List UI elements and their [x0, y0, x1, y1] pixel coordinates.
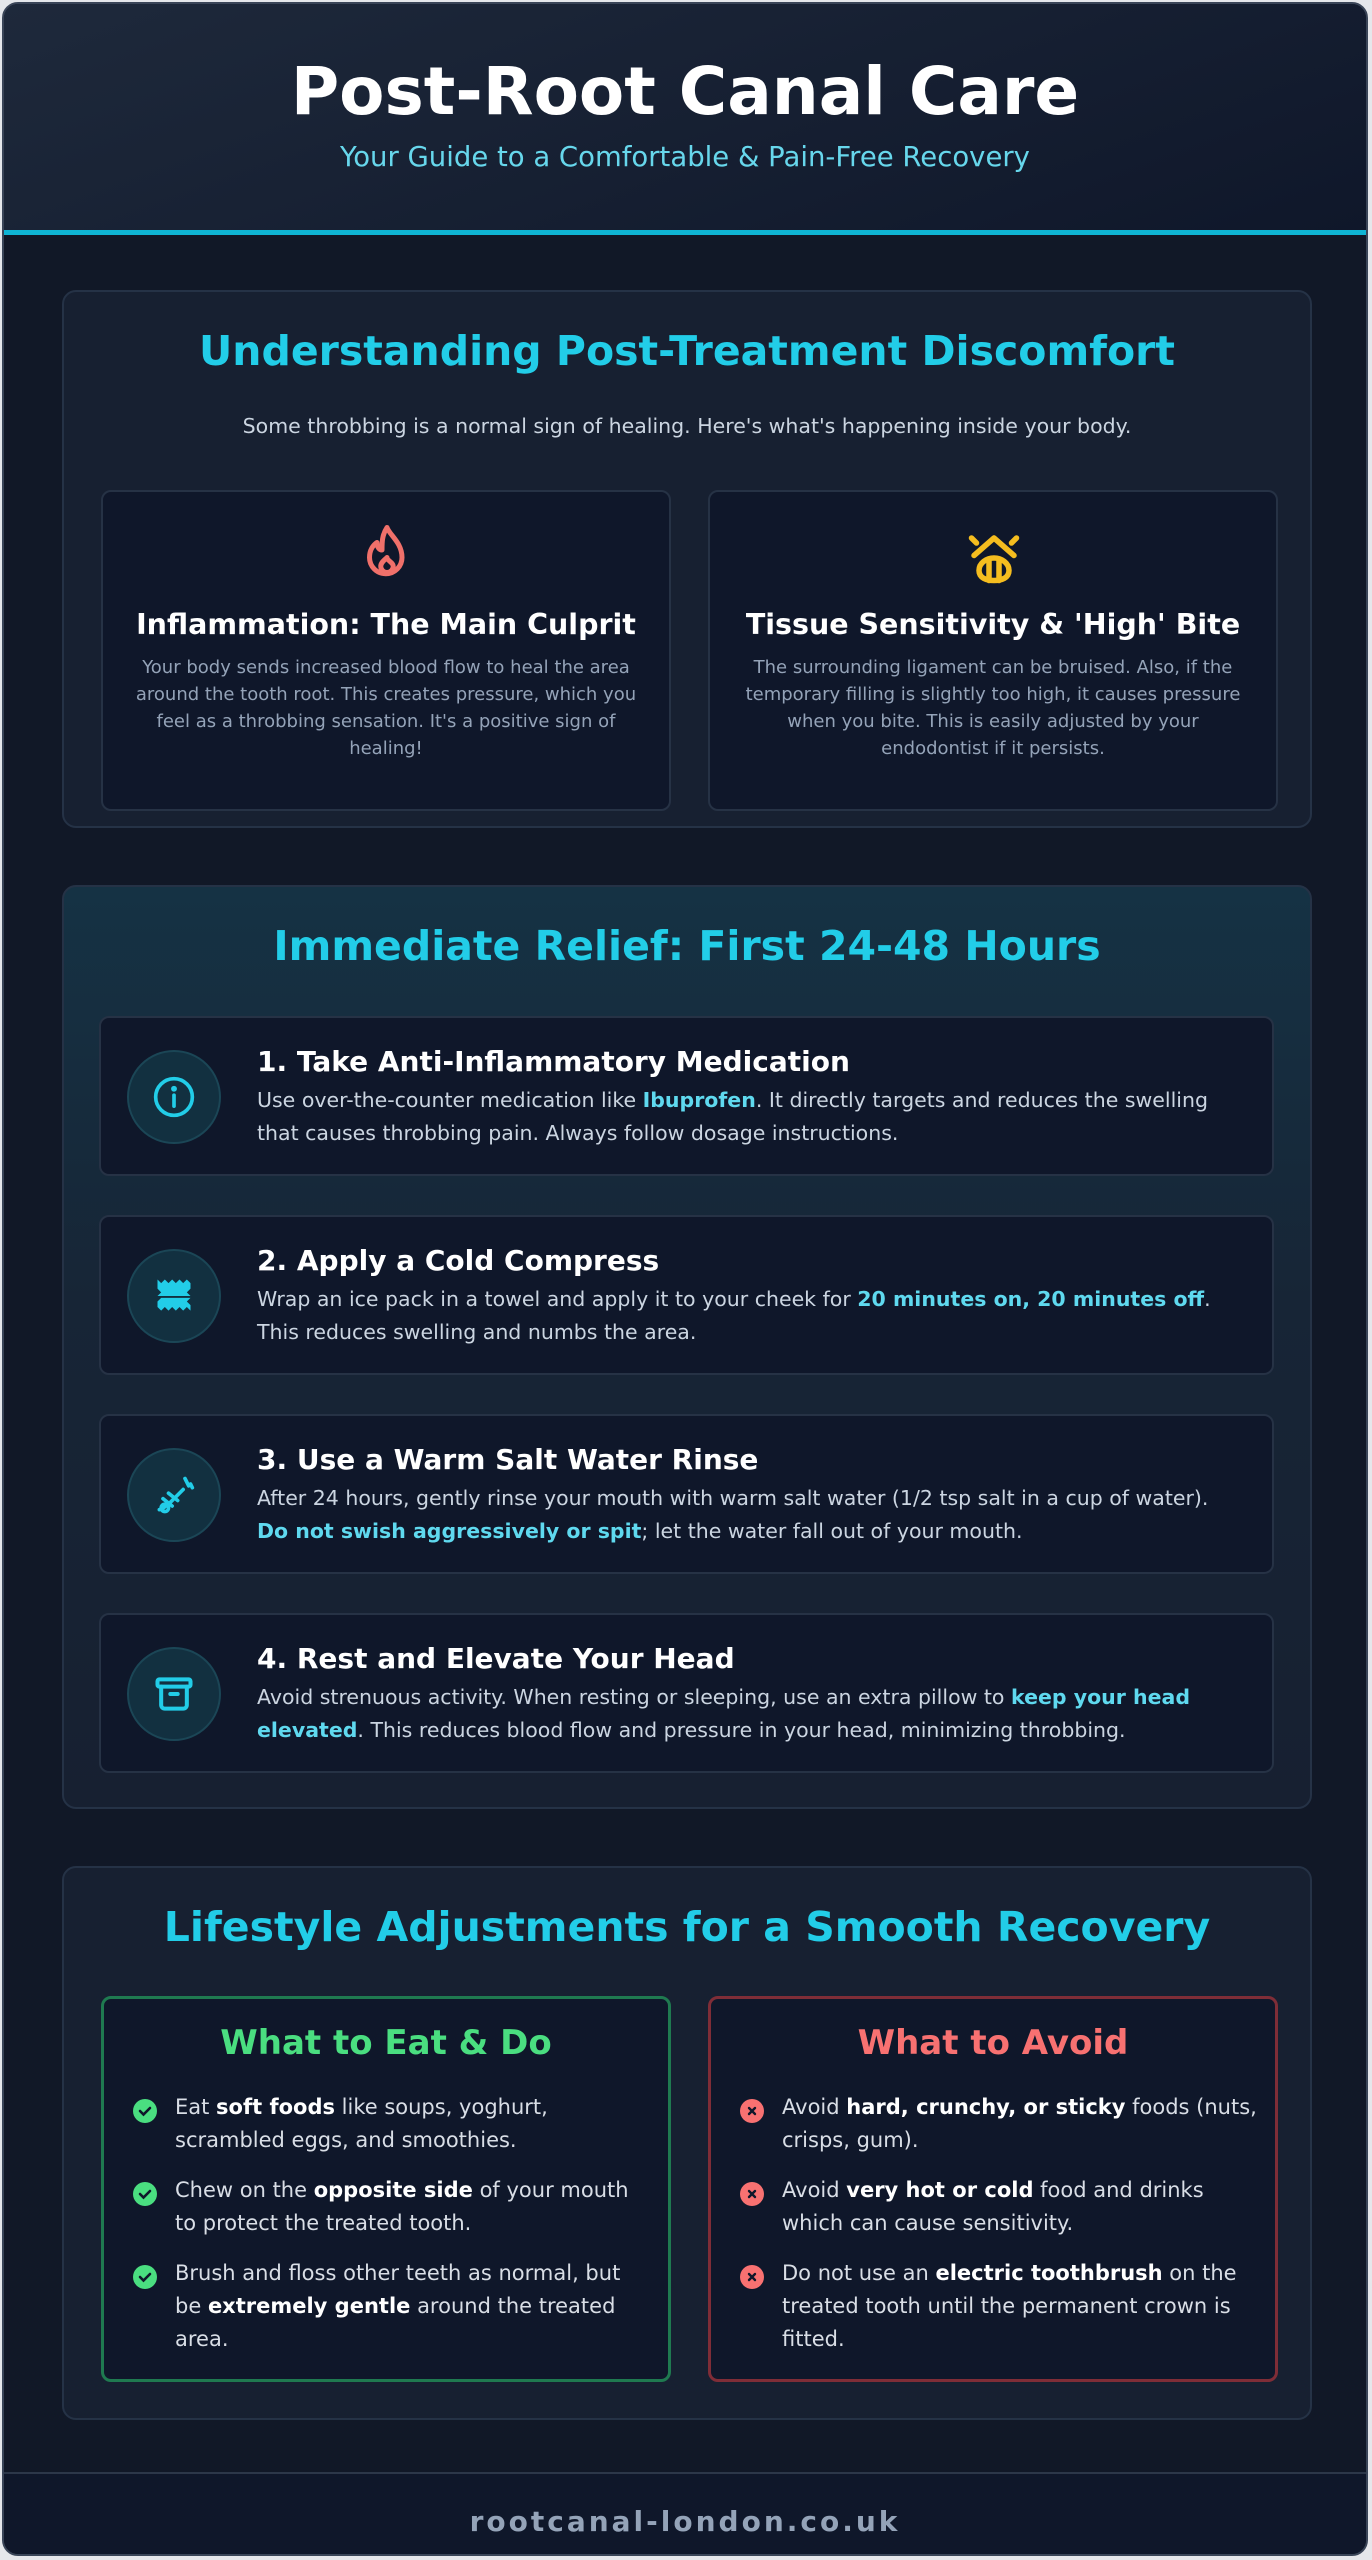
item: Chew on the opposite side of your mouth to protect the treated tooth.	[175, 2178, 629, 2235]
intro text: Some throbbing is a normal sign of healing. Here's what's happening inside your body.	[243, 414, 1131, 438]
item: Do not use an electric toothbrush on the treated tooth until the permanent crown is fitted.	[782, 2261, 1237, 2351]
heading: Understanding Post-Treatment Discomfort	[199, 327, 1175, 375]
step text: Wrap an ice pack in a towel and apply it to your cheek for 20 minutes on, 20 minutes off. This reduces swelling and numbs the area.	[257, 1287, 1211, 1344]
header	[4, 4, 1366, 230]
card heading: Inflammation: The Main Culprit	[136, 608, 636, 641]
box heading: What to Eat & Do	[220, 2023, 552, 2063]
list	[740, 2095, 1257, 2351]
step 4	[99, 1613, 1274, 1773]
card heading: Tissue Sensitivity & 'High' Bite	[746, 608, 1240, 641]
box: what to avoid	[708, 1996, 1278, 2382]
subtitle: Your Guide to a Comfortable & Pain-Free Recovery	[340, 141, 1030, 173]
step 3	[99, 1414, 1274, 1574]
step heading: 2. Apply a Cold Compress	[257, 1244, 659, 1277]
step text: After 24 hours, gently rinse your mouth with warm salt water (1/2 tsp salt in a cup of water). Do not swish aggressively or spit; let the water fall out of your mouth.	[257, 1486, 1208, 1543]
step 1	[99, 1016, 1274, 1176]
icon: flame	[367, 525, 404, 576]
card: inflammation	[101, 490, 671, 811]
item: Eat soft foods like soups, yoghurt, scrambled eggs, and smoothies.	[175, 2095, 548, 2152]
panel: immediate relief	[62, 885, 1312, 1809]
box: what to eat & do	[101, 1996, 671, 2382]
step text: Use over-the-counter medication like Ibuprofen. It directly targets and reduces the swelling that causes throbbing pain. Always follow dosage instructions.	[257, 1088, 1208, 1145]
item: Avoid hard, crunchy, or sticky foods (nuts, crisps, gum).	[782, 2095, 1257, 2152]
icon: tooth with pressure	[968, 535, 1020, 584]
list	[133, 2095, 629, 2351]
footer	[4, 2472, 1366, 2560]
step text: Avoid strenuous activity. When resting or sleeping, use an extra pillow to keep your head elevated. This reduces blood flow and pressure in your head, minimizing throbbing.	[257, 1685, 1190, 1742]
panel: lifestyle adjustments	[62, 1866, 1312, 2420]
footer text: rootcanal-london.co.uk	[470, 2505, 900, 2538]
step heading: 1. Take Anti-Inflammatory Medication	[257, 1045, 850, 1078]
step heading: 3. Use a Warm Salt Water Rinse	[257, 1443, 758, 1476]
icon: info	[127, 1050, 221, 1144]
icon: ice	[127, 1249, 221, 1343]
panel: understanding discomfort	[62, 290, 1312, 828]
title: Post-Root Canal Care	[291, 53, 1079, 130]
step heading: 4. Rest and Elevate Your Head	[257, 1642, 735, 1675]
box heading: What to Avoid	[858, 2023, 1128, 2063]
icon: rinse	[127, 1448, 221, 1542]
item: Avoid very hot or cold food and drinks which can cause sensitivity.	[782, 2178, 1204, 2235]
heading: Lifestyle Adjustments for a Smooth Recovery	[164, 1903, 1210, 1951]
heading: Immediate Relief: First 24-48 Hours	[273, 922, 1101, 970]
icon: box/pillow	[127, 1647, 221, 1741]
card text: The surrounding ligament can be bruised. Also, if the temporary filling is slightly too high, it causes pressure when you bite. This is easily adjusted by your endodontist if it persists.	[746, 657, 1240, 759]
item: Brush and floss other teeth as normal, but be extremely gentle around the treated area.	[175, 2261, 620, 2351]
card: tissue sensitivity	[708, 490, 1278, 811]
card text: Your body sends increased blood flow to heal the area around the tooth root. This creates pressure, which you feel as a throbbing sensation. It's a positive sign of healing!	[136, 657, 636, 759]
step 2	[99, 1215, 1274, 1375]
